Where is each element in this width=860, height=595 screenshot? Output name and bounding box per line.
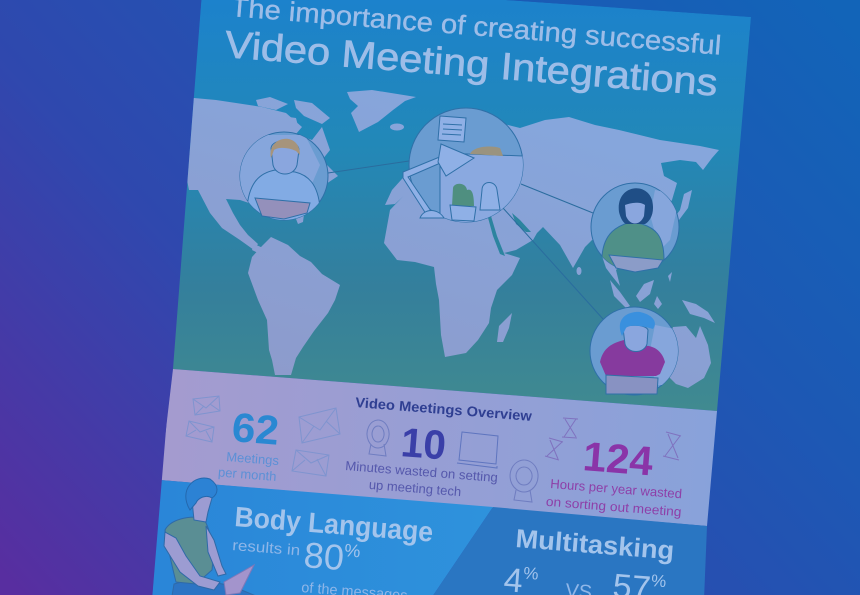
body language heading: Body Language bbox=[234, 501, 434, 548]
light desk surface bbox=[440, 153, 524, 224]
right arm bbox=[206, 526, 226, 576]
lamp bbox=[403, 144, 474, 218]
person one circle bbox=[240, 132, 328, 222]
Borneo bbox=[636, 280, 654, 302]
lamp arm bbox=[402, 157, 439, 212]
multitasking heading: Multitasking bbox=[515, 523, 675, 565]
North America bbox=[185, 98, 338, 250]
stat label: meetings per month: Meetings bbox=[226, 449, 280, 468]
envelope three bbox=[299, 408, 340, 443]
cactus bbox=[452, 184, 474, 206]
South America bbox=[248, 237, 340, 375]
Africa and Arabia bbox=[384, 190, 520, 357]
circle base bbox=[409, 108, 523, 222]
lamp base bbox=[420, 210, 444, 218]
tilted infographic sheet bbox=[152, 0, 751, 595]
circle base bbox=[240, 132, 328, 220]
line to person three bbox=[503, 208, 603, 319]
plant pot bbox=[450, 205, 476, 221]
circle base bbox=[591, 183, 679, 271]
Australia bbox=[670, 326, 711, 388]
person two circle bbox=[591, 183, 680, 272]
Red Sea and Persian Gulf bbox=[487, 213, 531, 256]
Arctic islands bbox=[256, 97, 330, 126]
envelope one bbox=[193, 396, 220, 415]
Greenland bbox=[347, 90, 416, 132]
desk scene circle bbox=[403, 108, 524, 224]
panel: multitasking bbox=[430, 507, 707, 595]
sweater bbox=[602, 222, 664, 272]
stat label: minutes wasted: Minutes wasted on setting bbox=[345, 458, 498, 485]
Eurasia bbox=[385, 117, 719, 268]
webcam one bbox=[367, 420, 389, 456]
laptop bbox=[609, 255, 663, 272]
Iceland bbox=[390, 124, 404, 130]
title line two: Video Meeting Integrations bbox=[223, 24, 719, 105]
Sri Lanka bbox=[576, 267, 582, 275]
New Guinea bbox=[682, 300, 715, 323]
hair bbox=[186, 478, 217, 510]
line to person two bbox=[521, 184, 593, 213]
face bbox=[625, 203, 645, 224]
land inside circle bbox=[240, 135, 320, 200]
blue hair bbox=[620, 312, 655, 336]
laptop icon bbox=[457, 432, 498, 468]
envelope two bbox=[186, 421, 214, 442]
stat: 62: 62 bbox=[230, 404, 281, 454]
stat label: minutes wasted: up meeting tech bbox=[368, 477, 462, 499]
stat: 4 percent: % bbox=[523, 564, 539, 584]
stat: 10: 10 bbox=[399, 419, 448, 469]
envelope four bbox=[292, 450, 329, 476]
Indonesia islands bbox=[654, 272, 672, 309]
hourglass icons bbox=[545, 418, 681, 460]
seated person with laptop bbox=[164, 478, 256, 595]
person three circle bbox=[590, 307, 680, 395]
envelope icons bbox=[186, 396, 340, 476]
overview heading: Video Meetings Overview bbox=[355, 394, 533, 424]
circle base bbox=[590, 307, 678, 395]
hair bbox=[270, 139, 300, 158]
green shirt bbox=[165, 517, 213, 584]
Madagascar bbox=[497, 313, 512, 342]
legs bbox=[172, 581, 256, 595]
panel: map background bbox=[173, 0, 751, 411]
connector lines bbox=[328, 161, 603, 319]
left arm bbox=[164, 532, 220, 590]
shoulders and shirt bbox=[247, 170, 320, 222]
laptop bbox=[255, 198, 310, 219]
neck and face bbox=[192, 490, 212, 522]
stat: 80 percent: % bbox=[344, 540, 361, 561]
world map bbox=[185, 90, 719, 388]
hourglass two bbox=[545, 438, 563, 460]
hourglass three bbox=[663, 432, 681, 460]
webcam shape bbox=[480, 182, 500, 210]
stat label: hours per year: Hours per year wasted bbox=[550, 476, 683, 501]
panel: body language bbox=[152, 480, 493, 595]
stat label: meetings per month: per month bbox=[218, 464, 277, 484]
face bbox=[623, 325, 648, 352]
lamp head bbox=[438, 144, 474, 176]
webcam icons bbox=[367, 420, 538, 502]
results in label: results in bbox=[232, 537, 301, 559]
laptop bbox=[606, 375, 658, 394]
Indochina bbox=[602, 257, 620, 286]
hair bbox=[619, 188, 653, 224]
document bbox=[438, 116, 466, 142]
brown object bbox=[470, 146, 503, 156]
stat: 124: 124 bbox=[581, 433, 655, 484]
Central America link bbox=[252, 246, 261, 252]
Japan bbox=[678, 190, 692, 220]
magenta shirt bbox=[600, 340, 665, 376]
stat label: hours per year: on sorting out meeting bbox=[545, 494, 682, 519]
webcam two bbox=[510, 460, 538, 502]
head bbox=[271, 141, 299, 174]
Sumatra bbox=[610, 280, 630, 308]
hourglass one bbox=[562, 418, 578, 438]
land inside circle bbox=[650, 325, 680, 385]
laptop bbox=[224, 565, 254, 595]
stat: 80 percent: 80 bbox=[302, 534, 346, 578]
stat: 57 percent: % bbox=[650, 571, 667, 591]
line to person one bbox=[328, 161, 409, 173]
land inside circle bbox=[650, 190, 680, 250]
panel: overview band bbox=[160, 369, 717, 526]
